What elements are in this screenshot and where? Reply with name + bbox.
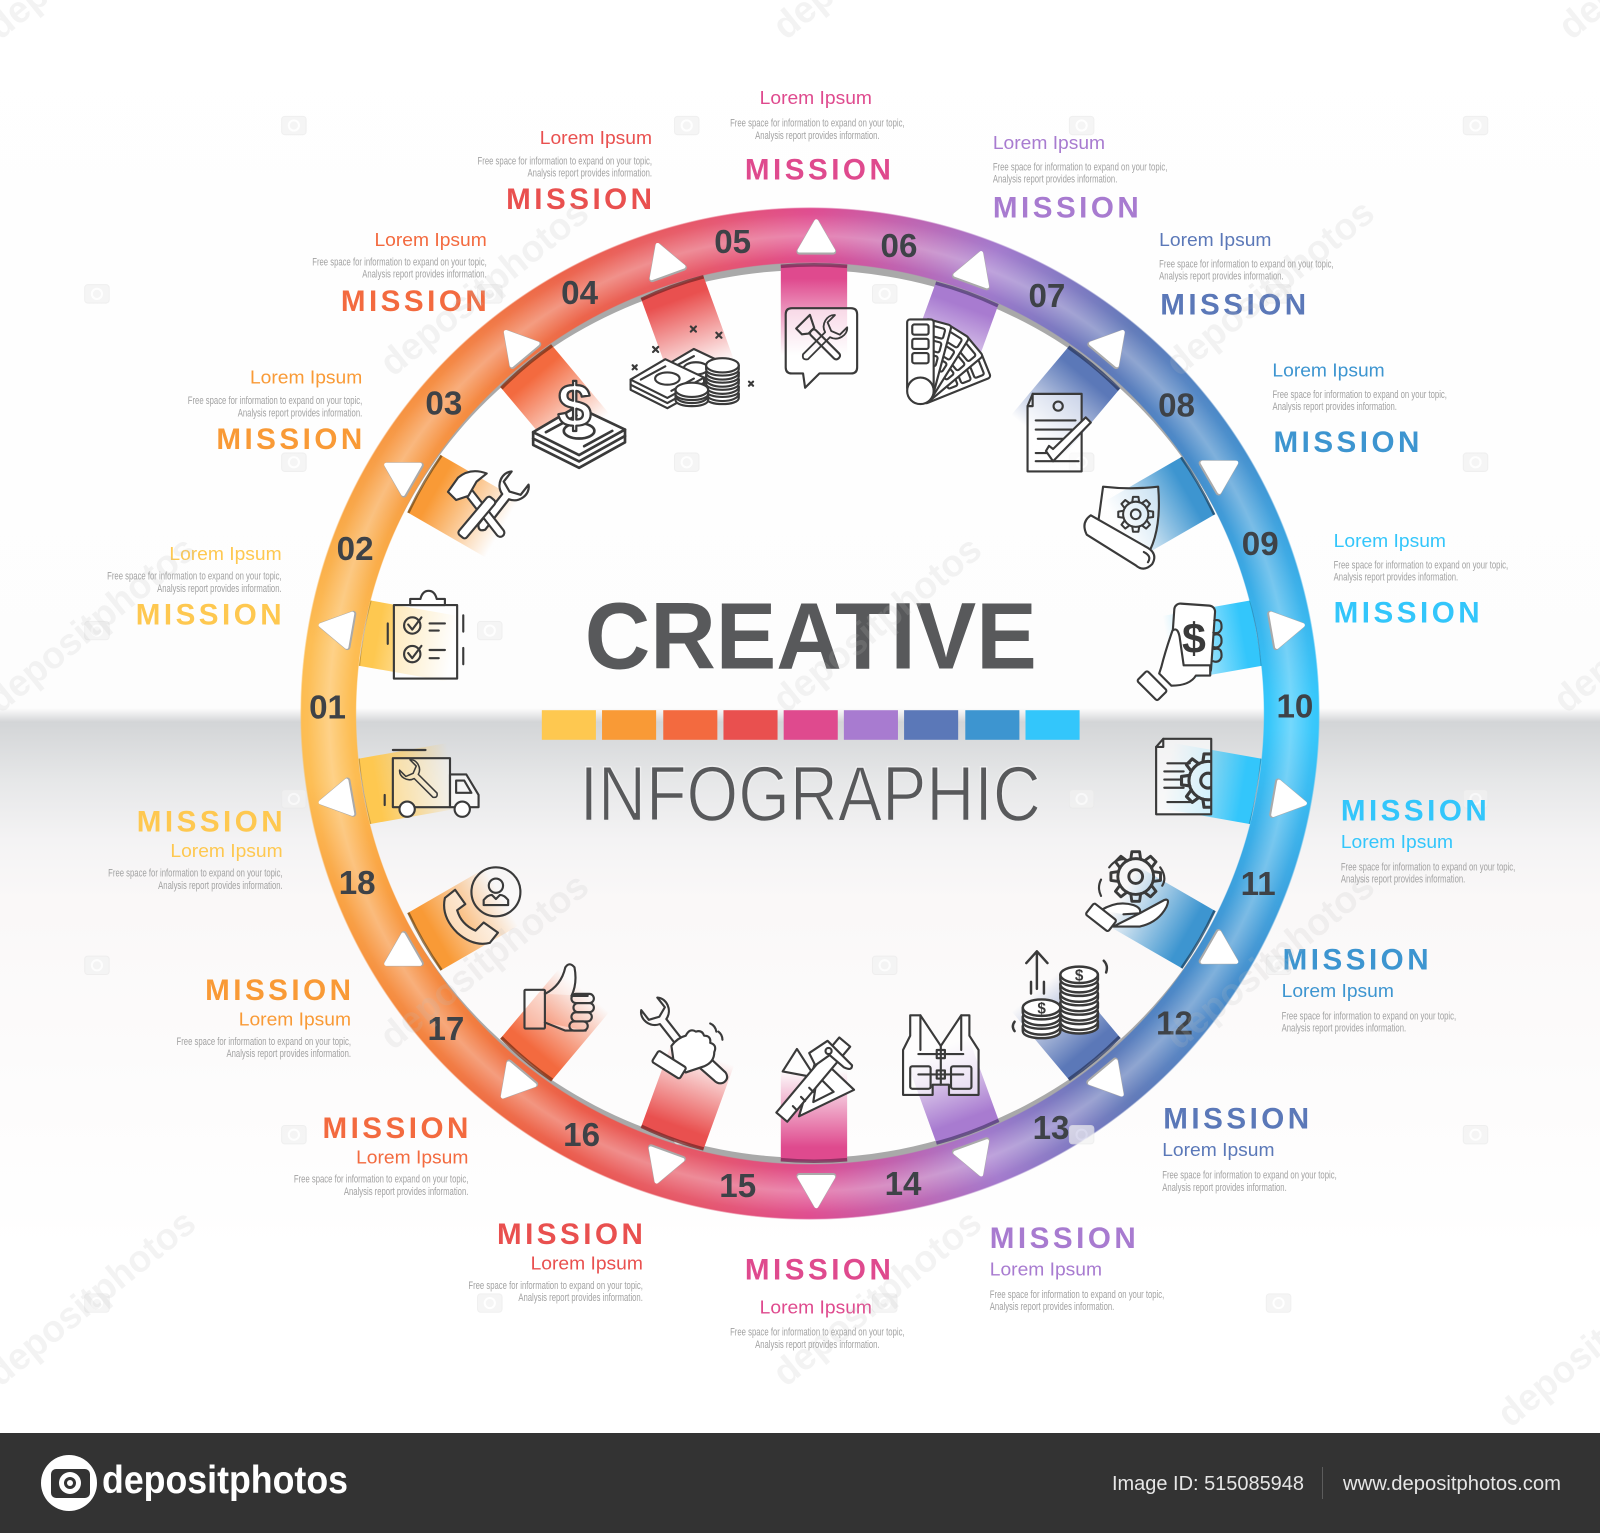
divider [1322, 1467, 1323, 1499]
ring step numbers: 06 [881, 228, 917, 265]
label: purple upper: Analysis report provides information. [993, 174, 1117, 186]
label: red upper: MISSION [506, 183, 652, 216]
label: orange lower: Lorem Ipsum [239, 1009, 351, 1030]
ring step numbers: 12 [1156, 1006, 1193, 1043]
icon: coins with up arrow [1013, 951, 1107, 1038]
label: orange upper: Lorem Ipsum [250, 367, 362, 388]
icon: hand gripping wrench [638, 995, 727, 1083]
subtitle: INFOGRAPHIC: INFOGRAPHIC [580, 751, 1041, 837]
label: purple lower: Analysis report provides information. [990, 1301, 1114, 1313]
icon: dollar on money stack: $ [557, 372, 592, 440]
label: purple upper [993, 132, 1167, 224]
label: blue lower: Analysis report provides information. [1282, 1023, 1406, 1035]
label: pink lower: Free space for information to expand on your topic, [730, 1327, 905, 1339]
label: blue upper: Lorem Ipsum [1272, 360, 1385, 381]
label: indigo lower: MISSION [1163, 1103, 1309, 1136]
label: cyan lower [1341, 794, 1515, 886]
footer bar [0, 1433, 1600, 1533]
label: blue lower: Lorem Ipsum [1282, 980, 1394, 1001]
label: cyan lower: Lorem Ipsum [1341, 831, 1453, 852]
website: www.depositphotos.com [1342, 1473, 1561, 1495]
icon: phone call with person [444, 867, 520, 944]
label: indigo upper: Free space for information to expand on your topic, [1159, 258, 1334, 270]
ring step numbers: 15 [719, 1168, 756, 1205]
ring step numbers [309, 224, 1313, 1205]
label: red lower: Free space for information to expand on your topic, [468, 1280, 643, 1292]
watermark text: depositphotos [764, 527, 989, 721]
label: purple lower: MISSION [990, 1222, 1136, 1255]
label: red lower: MISSION [497, 1218, 643, 1251]
label: deep orange upper [312, 229, 487, 318]
label: cyan upper: Lorem Ipsum [1334, 530, 1446, 551]
label: deep orange lower: Analysis report provides information. [344, 1186, 468, 1198]
label: pink upper: Analysis report provides information. [755, 130, 880, 142]
grey inner rim of the ring [346, 262, 1274, 1166]
icon: clipboard checklist [388, 591, 463, 679]
label: indigo upper: Lorem Ipsum [1159, 229, 1271, 250]
label: indigo upper [1159, 229, 1334, 321]
label: blue upper: MISSION [1273, 426, 1419, 459]
label: orange lower [177, 974, 351, 1060]
label: deep orange lower: Free space for information to expand on your topic, [294, 1174, 468, 1186]
ring step numbers: 17 [427, 1011, 464, 1048]
label: orange upper: MISSION [216, 423, 362, 456]
watermark text: depositphotos [764, 1201, 989, 1394]
label: yellow upper: MISSION [136, 598, 282, 631]
label: deep orange lower: Lorem Ipsum [356, 1146, 468, 1167]
label: deep orange upper: Lorem Ipsum [374, 229, 487, 250]
label: blue upper: Analysis report provides information. [1272, 401, 1397, 413]
label: blue lower [1282, 943, 1456, 1035]
label: blue lower: Free space for information to expand on your topic, [1282, 1010, 1456, 1022]
icon: coins with up arrow: $ [1075, 968, 1084, 985]
icon: service truck [385, 750, 479, 817]
label: purple upper: Lorem Ipsum [993, 132, 1105, 153]
label: pink lower: Analysis report provides information. [755, 1339, 880, 1351]
watermark text: depositphotos [1157, 191, 1382, 384]
label: deep orange lower: MISSION [322, 1112, 468, 1145]
label: orange lower: MISSION [205, 974, 351, 1007]
label: cyan upper: MISSION [1334, 596, 1480, 629]
ring step numbers: 07 [1028, 278, 1065, 315]
label: yellow upper [107, 543, 282, 631]
label: indigo lower: Lorem Ipsum [1162, 1139, 1274, 1160]
label: yellow lower: Free space for information to expand on your topic, [108, 868, 283, 880]
image id: Image ID: 515085948 [1112, 1473, 1304, 1495]
ring step numbers: 03 [425, 385, 462, 422]
icon: rulers and set square [776, 1037, 854, 1122]
label: blue lower: MISSION [1283, 943, 1429, 976]
title: CREATIVE: CREATIVE [585, 583, 1037, 689]
ring step numbers: 09 [1242, 526, 1279, 563]
ring step numbers: 11 [1241, 866, 1276, 903]
label: yellow upper: Free space for information to expand on your topic, [107, 571, 282, 583]
ring step numbers: 16 [563, 1117, 600, 1154]
label: cyan lower: Analysis report provides information. [1341, 874, 1465, 886]
label: red lower: Lorem Ipsum [531, 1252, 643, 1273]
label: red lower: Analysis report provides information. [518, 1292, 643, 1304]
label: red upper: Analysis report provides information. [528, 168, 652, 180]
icon: tools speech bubble [786, 308, 857, 388]
label: red lower [468, 1218, 643, 1304]
icon: hand holding gear [1085, 852, 1168, 932]
icon: document with check mark [1028, 394, 1091, 471]
label: indigo lower: Free space for information to expand on your topic, [1162, 1170, 1337, 1182]
label: orange upper [188, 367, 362, 456]
connector bars from ring to icons [358, 265, 1263, 1161]
ring step numbers: 13 [1033, 1110, 1069, 1147]
label: pink lower: Lorem Ipsum [760, 1296, 872, 1317]
label: red upper: Free space for information to expand on your topic, [478, 155, 652, 167]
icon: thumbs up [524, 964, 594, 1031]
watermark text: depositphotos [371, 191, 596, 384]
label: indigo lower: Analysis report provides information. [1162, 1182, 1287, 1194]
ring triangles [318, 221, 1308, 1206]
icon: coins with up arrow: $ [1037, 1001, 1046, 1018]
label: cyan lower: Free space for information to expand on your topic, [1341, 861, 1515, 873]
label: purple upper: Free space for information to expand on your topic, [993, 161, 1167, 173]
label: pink lower: MISSION [745, 1254, 891, 1287]
label: cyan upper [1334, 530, 1508, 629]
ring step numbers: 04 [561, 275, 599, 312]
icon: hand holding phone with dollar [1137, 603, 1222, 701]
label: deep orange upper: Free space for information to expand on your topic, [312, 256, 487, 268]
label: pink upper: MISSION [745, 154, 891, 187]
label: yellow lower: Lorem Ipsum [170, 840, 283, 861]
label: orange lower: Analysis report provides information. [227, 1048, 351, 1060]
label: pink lower [730, 1254, 905, 1351]
label: indigo upper: MISSION [1160, 288, 1306, 321]
logo wordmark: depositphotos [102, 1459, 348, 1502]
icon: colour palette fan [907, 319, 991, 404]
icon: dollar on money stack [533, 372, 625, 468]
icon: document with gear [1155, 738, 1212, 816]
label: pink upper [730, 87, 905, 187]
label: cyan upper: Free space for information to expand on your topic, [1334, 559, 1508, 571]
label: orange lower: Free space for information to expand on your topic, [177, 1036, 351, 1048]
ring step numbers: 01 [309, 689, 346, 726]
ring step numbers: 08 [1158, 387, 1195, 424]
watermark text: depositphotos [1157, 864, 1382, 1057]
label: yellow lower: Analysis report provides information. [158, 880, 283, 892]
colour swatch strip [542, 710, 1080, 740]
label: pink upper: Free space for information to expand on your topic, [730, 118, 905, 130]
icon: hammer and wrench [448, 469, 532, 540]
watermark text: depositphotos [371, 864, 596, 1057]
label: indigo upper: Analysis report provides information. [1159, 271, 1284, 283]
label: cyan lower: MISSION [1341, 794, 1487, 827]
label: cyan upper: Analysis report provides information. [1334, 572, 1458, 584]
icon: hand holding phone with dollar: $ [1182, 615, 1206, 663]
label: purple lower: Free space for information to expand on your topic, [990, 1289, 1164, 1301]
label: yellow upper: Analysis report provides information. [157, 583, 282, 595]
ring step numbers: 14 [885, 1166, 922, 1203]
label: blue upper [1272, 360, 1447, 459]
label: red upper: Lorem Ipsum [540, 127, 652, 148]
label: red upper [478, 127, 652, 216]
label: yellow upper: Lorem Ipsum [169, 543, 282, 564]
label: pink upper: Lorem Ipsum [760, 87, 872, 108]
label: purple lower: Lorem Ipsum [990, 1259, 1102, 1280]
gradient ring [300, 207, 1320, 1220]
label: indigo lower [1162, 1103, 1337, 1194]
ring step numbers: 05 [714, 224, 751, 261]
ring step numbers: 02 [337, 531, 374, 568]
watermark cameras [85, 116, 1488, 1312]
icon: rolled map with gear [1084, 487, 1159, 569]
label: orange upper: Analysis report provides information. [238, 407, 362, 419]
label: yellow lower: MISSION [137, 806, 283, 839]
label: blue upper: Free space for information to expand on your topic, [1272, 389, 1447, 401]
label: deep orange upper: MISSION [341, 285, 487, 318]
label: deep orange lower [294, 1112, 468, 1198]
logo: camera badge [41, 1455, 97, 1511]
label: purple lower [990, 1222, 1164, 1313]
icon: cash and coins [631, 327, 753, 408]
ring step numbers: 18 [339, 865, 376, 902]
label: deep orange upper: Analysis report provides information. [362, 269, 487, 281]
icon: safety vest [903, 1015, 979, 1095]
label: yellow lower [108, 806, 283, 892]
label: purple upper: MISSION [993, 191, 1139, 224]
ring step numbers: 10 [1276, 688, 1313, 725]
label: orange upper: Free space for information to expand on your topic, [188, 395, 362, 407]
